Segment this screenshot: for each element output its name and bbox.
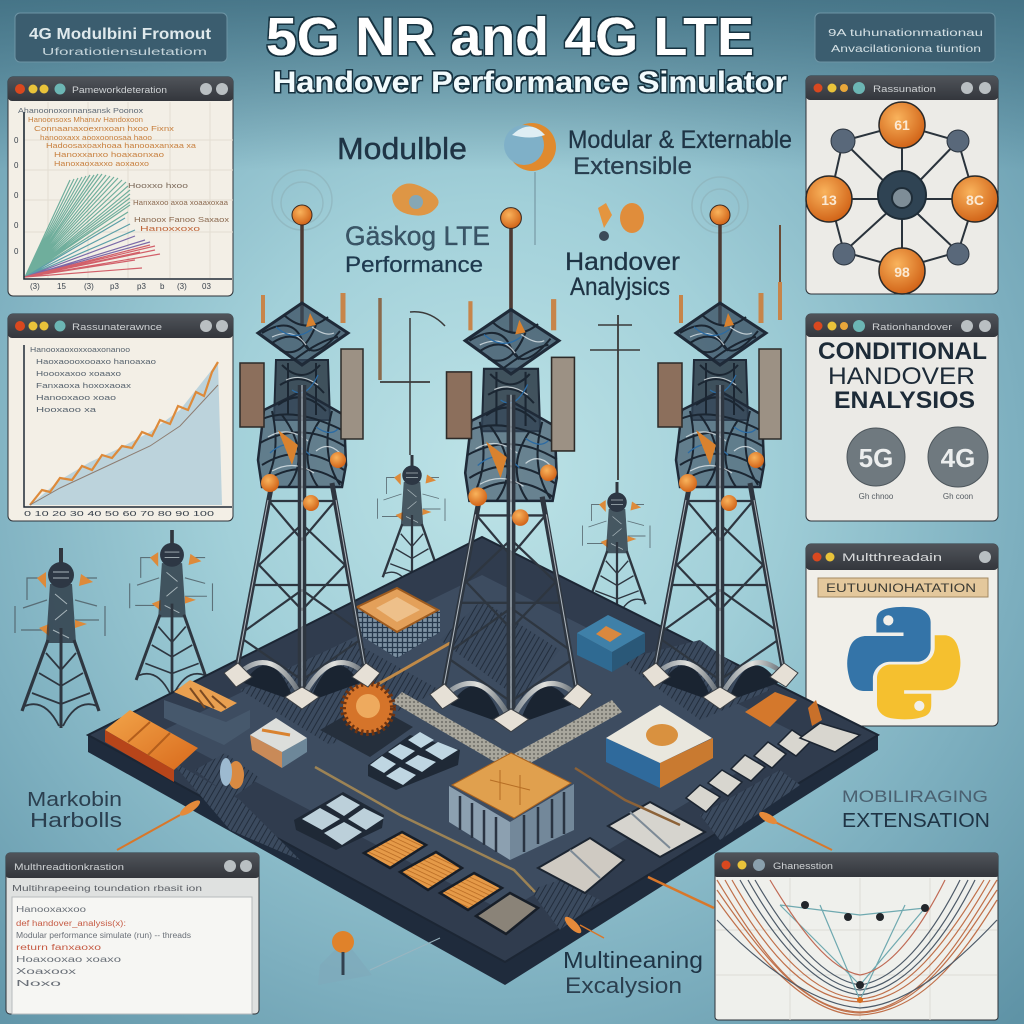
icon: bottom gear xyxy=(318,931,440,985)
chart: listed labels: Fanxaoxa hoxoxaoax xyxy=(36,381,131,390)
title: 5G NR and 4G LTE xyxy=(266,7,754,67)
chart: axis labels: 15 xyxy=(57,282,66,291)
component: orange chip 2 xyxy=(400,852,462,890)
label: Multineaning Excalysion: Excalysion xyxy=(565,973,682,998)
chart: listed labels: 0 10 20 30 40 50 60 70 80 90 100 xyxy=(24,509,214,518)
code lines xyxy=(16,905,191,988)
code lines: Modular performance simulate (run) -- threads xyxy=(16,931,191,940)
panel: conditional handover window: CONDITIONAL xyxy=(818,338,987,365)
label: Modular and Extensible: Extensible xyxy=(573,153,692,180)
component: orange chip 1 xyxy=(364,832,426,868)
component: small panel row xyxy=(686,723,860,812)
component: orange chip 3 xyxy=(440,873,502,910)
badge: top right: Anvacilationiona tiuntion xyxy=(831,43,981,55)
network graph xyxy=(806,102,998,294)
badge: top left xyxy=(15,13,227,62)
label: Modular and Extensible: Modular & Externable xyxy=(568,126,792,154)
chart: scattered labels: Hanoxxoxo xyxy=(140,224,200,233)
walkway: right xyxy=(506,700,622,770)
chart: listed labels xyxy=(24,345,214,518)
chart: performance area xyxy=(30,362,222,505)
label: Multineaning Excalysion: Multineaning xyxy=(563,947,703,973)
small tower: far left xyxy=(15,548,105,728)
chart: axis labels: 0 xyxy=(14,161,19,170)
label: LTE Performance xyxy=(345,221,490,277)
panel: conditional handover window: HANDOVER xyxy=(828,363,975,390)
title xyxy=(266,7,787,99)
tower: right xyxy=(642,205,798,709)
small tower: back left xyxy=(378,455,445,590)
surface detail xyxy=(170,600,800,930)
label: Modulble: Modulble xyxy=(337,131,467,166)
chart: curves xyxy=(717,880,997,1015)
panel: area chart window: Rassunaterawnce xyxy=(72,322,162,332)
panel: python window: Multthreadain xyxy=(842,552,942,564)
chart: listed labels: Hanooxaoxoxxoaxonanoo xyxy=(30,345,130,354)
code lines: Hoaxooxao xoaxo xyxy=(16,955,122,964)
panel: network window: Rassunation xyxy=(873,84,936,94)
component: striped module xyxy=(195,753,260,798)
label: LTE Performance: Performance xyxy=(345,252,483,277)
panel: conditional handover window: Gh chnoo xyxy=(859,492,894,501)
panel: fan chart window: Pameworkdeteration xyxy=(72,85,167,95)
chart: nodes xyxy=(801,901,929,989)
label: Extensation: MOBILIRAGING xyxy=(842,787,988,806)
code lines: Hanooxaxxoo xyxy=(16,905,87,914)
badge: top right: 9A tuhunationmationau xyxy=(828,27,983,39)
icon: modular sphere xyxy=(504,123,556,245)
panel: curve network window xyxy=(715,853,998,1020)
panel: conditional handover window: ENALYSIOS xyxy=(834,387,975,414)
network graph: 13 xyxy=(821,192,837,208)
badge: top left: Uforatiotiensuletatiom xyxy=(42,47,207,58)
panel: code window: Multihrapeeing toundation rbasit ion xyxy=(12,884,202,893)
chart: scattered labels: Hooxxo hxoo xyxy=(128,181,188,190)
component: orange block upper xyxy=(164,680,250,745)
tower: center xyxy=(430,208,592,732)
chart: axis labels: (3) xyxy=(177,282,187,291)
antenna pole: center left xyxy=(380,298,445,455)
component: central tall box xyxy=(449,753,574,860)
panel: code window: Multhreadtionkrastion xyxy=(14,862,124,872)
signal rings: left tower xyxy=(272,170,332,230)
chart: scattered labels: Hadoosaxoaxhoaa hanooaxanxaa xa xyxy=(46,141,197,150)
badge: 5G: 5G xyxy=(859,443,893,473)
icon: python logo xyxy=(847,607,960,719)
chart: scattered labels: Hanoonsoxs Mhanuv Handoxoon xyxy=(28,115,143,124)
panel: conditional handover window: Gh coon xyxy=(943,492,973,501)
chart: signal fan xyxy=(25,174,160,277)
panel: network window xyxy=(806,76,998,294)
component: back blue box xyxy=(577,615,645,672)
chart: axis labels xyxy=(14,136,211,291)
panel: conditional handover window xyxy=(806,314,998,521)
tower: left xyxy=(224,205,380,709)
panel: python window xyxy=(806,544,998,726)
chart: listed labels: Hoooxaxoo xoaaxo xyxy=(36,369,121,378)
platform xyxy=(88,537,878,985)
panel: conditional handover window: Rationhandover xyxy=(872,322,952,332)
code lines: return fanxaoxo xyxy=(16,943,102,952)
chart: scattered labels: Hanoxxanxo hoaxaonxao xyxy=(54,150,164,159)
component: white box xyxy=(606,705,713,788)
panel: curve network window: Ghanesstion xyxy=(773,861,833,871)
component: orange block left xyxy=(105,710,198,782)
walkway: left xyxy=(392,692,512,765)
panel: python window: EUTUUNIOHATATION xyxy=(826,581,976,595)
chart: axis labels: 0 xyxy=(14,191,19,200)
network graph: 8C xyxy=(966,192,984,208)
antenna pole: center right xyxy=(590,225,780,480)
chart: axis labels: 0 xyxy=(14,247,19,256)
label: LTE Performance: Gäskog LTE xyxy=(345,221,490,251)
label: Multineaning Excalysion xyxy=(563,947,703,998)
chart: axis labels: 03 xyxy=(202,282,211,291)
badge: 4G xyxy=(928,427,988,487)
network graph: 98 xyxy=(894,264,910,280)
chart: axis labels: (3) xyxy=(84,282,94,291)
label: Modular and Extensible xyxy=(568,126,792,180)
label: Extensation: EXTENSATION xyxy=(842,810,990,832)
chart: axis labels: 0 xyxy=(14,221,19,230)
label: Handover Analytics xyxy=(565,248,680,301)
component: light panels lower xyxy=(538,802,705,893)
chart: listed labels: Hanooxaoo xoao xyxy=(36,393,116,402)
label: Markobin Harbolls: Markobin xyxy=(27,789,122,811)
badge: 4G: 4G xyxy=(941,443,975,473)
icon: orange blob xyxy=(392,183,439,216)
component: cube xyxy=(250,718,307,768)
component: four light cubes xyxy=(294,792,384,850)
component: back orange box xyxy=(357,588,440,658)
chart: scattered labels xyxy=(18,106,229,233)
connector: bottom xyxy=(562,914,604,938)
connector: left xyxy=(117,798,202,850)
component: six light cubes xyxy=(368,732,460,790)
label: Markobin Harbolls xyxy=(27,789,122,832)
network graph: 61 xyxy=(894,117,910,133)
panel: fan chart window xyxy=(8,77,233,296)
connector: lower right xyxy=(648,877,714,908)
wire: circuit trace xyxy=(315,767,535,892)
chart: axis labels: p3 xyxy=(110,282,119,291)
chart: axis labels: (3) xyxy=(30,282,40,291)
chart: scattered labels: Hanoxaoxaxxo aoxaoxo xyxy=(54,159,149,168)
code lines: Xoaxoox xyxy=(16,967,76,976)
wire: internal antennas xyxy=(575,768,680,825)
chart: scattered labels: Connaanaxoexnxoan hxoo Fixnx xyxy=(34,124,174,133)
chart: scattered labels: Hanxaxoo axoa xoaaxoxaa xyxy=(133,198,229,207)
icon: orange parts xyxy=(598,203,644,241)
title: Handover Performance Simulator xyxy=(273,66,787,99)
signal rings: right tower xyxy=(692,177,748,233)
chart: axis labels: b xyxy=(160,282,165,291)
panel: area chart window xyxy=(8,314,233,521)
label: Markobin Harbolls: Harbolls xyxy=(30,810,122,832)
wire: upper trace xyxy=(373,643,450,687)
small tower: back right xyxy=(582,482,650,617)
chart: listed labels: Haoxaoooxooaxo hanoaxao xyxy=(36,357,156,366)
chart: scattered labels: Hanoox Fanoo Saxaox xyxy=(134,215,229,224)
panel: code window xyxy=(6,853,259,1014)
small tower: second left xyxy=(130,530,212,696)
chart: listed labels: Hooxaoo xa xyxy=(36,405,97,414)
badge: top right xyxy=(815,13,995,62)
component: orange parts right xyxy=(745,692,822,727)
chart: scattered labels: Ahanoonoxonnansansk Poonox xyxy=(18,106,143,115)
badge: 5G xyxy=(847,428,905,486)
label: Handover Analytics: Analyjsics xyxy=(570,273,670,301)
code lines: Noxo xyxy=(16,979,62,988)
label: Handover Analytics: Handover xyxy=(565,248,680,276)
component: striped chip 4 xyxy=(476,893,538,934)
chart: axis labels: 0 xyxy=(14,136,19,145)
chart: axis labels: p3 xyxy=(137,282,146,291)
code lines: def handover_analysis(x): xyxy=(16,919,126,928)
connector: right xyxy=(757,810,832,850)
chart: scattered labels: hanooxaxx aooxoonosaa haoo xyxy=(40,133,152,142)
badge: top left: 4G Modulbini Fromout xyxy=(29,26,212,43)
label: Extensation xyxy=(842,787,990,832)
component: orange spiky ball xyxy=(320,683,413,757)
